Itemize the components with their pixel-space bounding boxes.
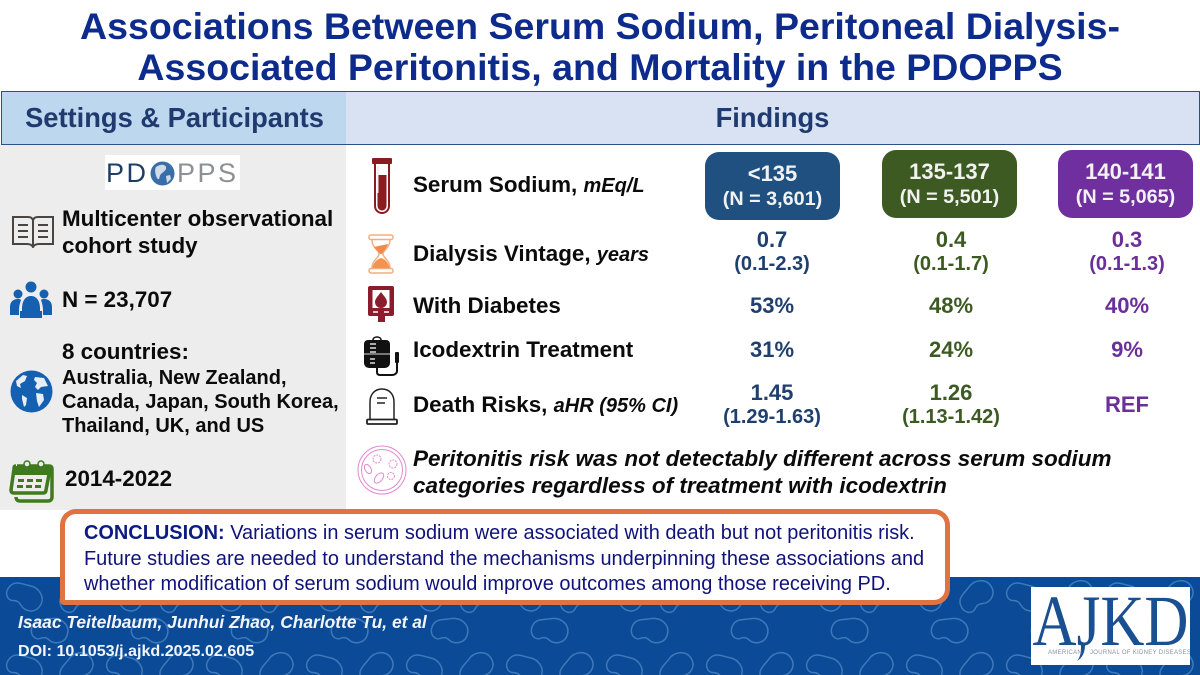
values: death low: 1.45 [751,380,793,405]
value: icodextrin high: 9% [1111,337,1143,362]
values: death mid: (1.13-1.42) [902,406,1000,428]
icon: dialysate bag [364,336,399,376]
callout: conclusion: CONCLUSION: Variations in serum sodium were associated with death but not peritonitis risk. [84,522,915,544]
icon: open book [12,216,54,248]
panel: settings background [0,145,346,510]
icon: glucose meter [368,286,394,322]
text: countries heading: 8 countries: [62,339,189,364]
text: sample size: N = 23,707 [62,287,172,312]
text: study years: 2014-2022 [65,466,172,491]
icon: tombstone [366,388,398,425]
callout: conclusion: Future studies are needed to understand the mechanisms underpinning these associations and [84,548,924,570]
text: doi: DOI: 10.1053/j.ajkd.2025.02.605 [18,642,254,660]
logo: AJKD: JOURNAL OF KIDNEY DISEASES [1090,650,1190,656]
pill: 135-137 [882,150,1017,218]
heading: findings: Findings [716,102,829,133]
pill: less than 135 [705,152,840,220]
heading: findings [346,91,1200,145]
values: vintage high sodium [1089,227,1165,275]
footer band [0,577,1200,675]
label: icodextrin treatment: Icodextrin Treatment [413,337,633,362]
value: diabetes mid: 48% [929,293,973,318]
text: study design: Multicenter observational [62,206,333,231]
logo: PDOPPS: PD [106,158,149,188]
values: vintage mid sodium: (0.1-1.7) [913,253,989,275]
icon: hourglass [368,234,394,274]
values: vintage mid sodium: 0.4 [936,227,966,252]
label: death risks: Death Risks, aHR (95% CI) [413,392,678,417]
label: dialysis vintage: Dialysis Vintage, years [413,241,649,266]
text: country list: Australia, New Zealand, [62,367,287,389]
value: diabetes low: 53% [750,293,794,318]
values: vintage low sodium: 0.7 [757,227,787,252]
value: icodextrin mid: 24% [929,337,973,362]
values: death mid: 1.26 [930,380,972,405]
text: peritonitis finding: Peritonitis risk was not detectably different across serum sodium [413,446,1112,471]
heading: settings & participants [1,91,347,145]
text: country list: Thailand, UK, and US [62,415,264,437]
text: country list [62,367,339,437]
text: study design: cohort study [62,233,198,258]
logo: PDOPPS [105,155,240,190]
values: vintage mid sodium [913,227,989,275]
values: vintage low sodium [734,227,810,275]
value: icodextrin low: 31% [750,337,794,362]
callout: conclusion: whether modification of serum sodium would improve outcomes among those receiving PD. [84,573,891,595]
icon: blood tube [372,158,392,214]
pill: 135-137: 135-137 [909,159,990,184]
pill: 140-141 [1058,150,1193,218]
text: country list: Canada, Japan, South Korea, [62,391,339,413]
text: peritonitis finding [413,446,1112,498]
pill: 140-141: (N = 5,065) [1076,186,1175,208]
label: with diabetes: With Diabetes [413,293,561,318]
title [80,5,1120,88]
values: death mid [902,380,1000,428]
value: diabetes high: 40% [1105,293,1149,318]
icon: petri dish [358,446,406,494]
values: vintage high sodium: (0.1-1.3) [1089,253,1165,275]
pill: less than 135: <135 [748,161,797,186]
pill: 135-137: (N = 5,501) [900,186,999,208]
icon: people [10,282,52,318]
values: death low: (1.29-1.63) [723,406,821,428]
label: serum sodium: Serum Sodium, mEq/L [413,172,645,197]
text: study design [62,206,333,258]
logo: PDOPPS: PPS [177,158,239,188]
text: peritonitis finding: categories regardless of treatment with icodextrin [413,473,947,498]
values: vintage low sodium: (0.1-2.3) [734,253,810,275]
logo: AJKD: AMERICAN [1048,650,1082,656]
values: vintage high sodium: 0.3 [1112,227,1142,252]
pill: 140-141: 140-141 [1085,159,1166,184]
icon: globe [10,370,52,412]
title: Associated Peritonitis, and Mortality in the PDOPPS [137,46,1063,88]
value: death reference: REF [1105,392,1149,417]
pill: less than 135: (N = 3,601) [723,188,822,210]
text: authors: Isaac Teitelbaum, Junhui Zhao, Charlotte Tu, et al [18,612,427,632]
heading: settings & participants: Settings & Participants [25,102,324,133]
title: Associations Between Serum Sodium, Peritoneal Dialysis- [80,5,1120,47]
callout: conclusion [60,509,950,605]
values: death low [723,380,821,428]
icon: calendar [9,460,54,503]
